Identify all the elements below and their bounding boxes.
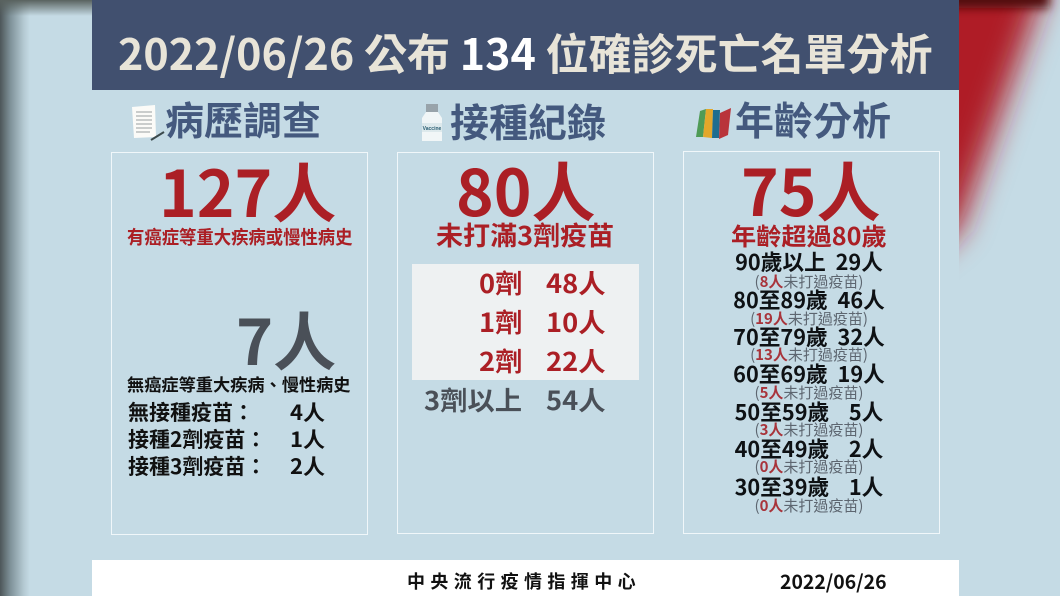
panel: age analysis frame: [683, 151, 940, 534]
unvaccinated: 5: (5人未打過疫苗): [754, 382, 864, 403]
age row: 40-49: 40至49歲 2人: [735, 433, 883, 464]
value: 10 people: 10人: [546, 303, 606, 340]
heading: vaccination record: 接種紀錄: [450, 93, 606, 149]
heading icon: books: [696, 108, 731, 139]
caption: over 80 years: 年齡超過80歲: [731, 217, 887, 252]
list: vaccination among 7: [128, 397, 325, 481]
row: 3 or more doses: 3劑以上: [424, 381, 522, 418]
value: 54 people: 54人: [546, 381, 606, 418]
unvaccinated: 0: (0人未打過疫苗): [754, 456, 864, 477]
age row: 70-79: 70至79歲 32人: [733, 321, 885, 352]
footer: date: 2022/06/26: [780, 566, 887, 595]
caption: without major illness: 無癌症等重大疾病、慢性病史: [127, 371, 350, 396]
value: 48 people: 48人: [546, 264, 606, 301]
stat: 127 people: 127人: [159, 144, 336, 236]
age row: 60-69: 60至69歲 19人: [733, 358, 885, 389]
age row: 50-59: 50至59歲 5人: [735, 396, 883, 427]
caption: fewer than 3 doses: 未打滿3劑疫苗: [436, 216, 614, 253]
background: left shadow: [0, 0, 30, 596]
stat: 80 people: 80人: [456, 143, 596, 235]
heading: medical history: 病歷調查: [165, 91, 321, 147]
icon: vaccine vial: Vaccine: [423, 126, 442, 132]
footer bar: [92, 560, 959, 596]
age row: 90 plus: 90歲以上 29人: [735, 246, 883, 277]
icon: vaccine vial: [422, 104, 442, 141]
row: 0 doses: 0劑: [479, 264, 522, 301]
age row: 80-89: 80至89歲 46人: [733, 284, 885, 315]
unvaccinated: 0: (0人未打過疫苗): [754, 495, 864, 516]
panel: medical history: [111, 91, 368, 535]
stat: 7 people: 7人: [236, 293, 336, 384]
panel frame: [397, 152, 654, 534]
age row: 30-39: 30至39歲 1人: [735, 471, 883, 502]
row: 2 doses: 2劑: [479, 342, 522, 379]
stat: 75 people: 75人: [741, 143, 881, 235]
title banner: [92, 0, 959, 90]
row: 2 doses: 1人: [290, 424, 325, 454]
panel: vaccination record: [397, 93, 654, 534]
row: no vaccine: 無接種疫苗：: [128, 397, 254, 427]
dose table highlight: [412, 264, 639, 380]
row: 1 dose: 1劑: [479, 303, 522, 340]
unvaccinated: 13: (13人未打過疫苗): [750, 344, 868, 365]
heading: age analysis: 年齡分析: [735, 91, 891, 147]
title text: 2022/06/26 公布 134 位確診死亡名單分析: [118, 21, 933, 83]
panel frame: [111, 152, 368, 535]
row: no vaccine: [128, 397, 325, 427]
row: 3 doses: 2人: [290, 451, 325, 481]
unvaccinated: 8: (8人未打過疫苗): [754, 271, 864, 292]
footer: issuing agency: 中央流行疫情指揮中心: [407, 568, 641, 594]
icon: document: [132, 105, 164, 141]
row: no vaccine: 4人: [290, 397, 325, 427]
row: 3 doses: 接種3劑疫苗：: [128, 451, 266, 481]
background: top-left shadow: [0, 0, 92, 16]
row: 2 doses: 接種2劑疫苗：: [128, 424, 266, 454]
unvaccinated: 19: (19人未打過疫苗): [750, 308, 868, 329]
value: 22 people: 22人: [546, 342, 606, 379]
background: red corner shape: [959, 0, 1060, 262]
unvaccinated: 3: (3人未打過疫苗): [754, 419, 864, 440]
caption: with major illness: 有癌症等重大疾病或慢性病史: [127, 224, 352, 250]
